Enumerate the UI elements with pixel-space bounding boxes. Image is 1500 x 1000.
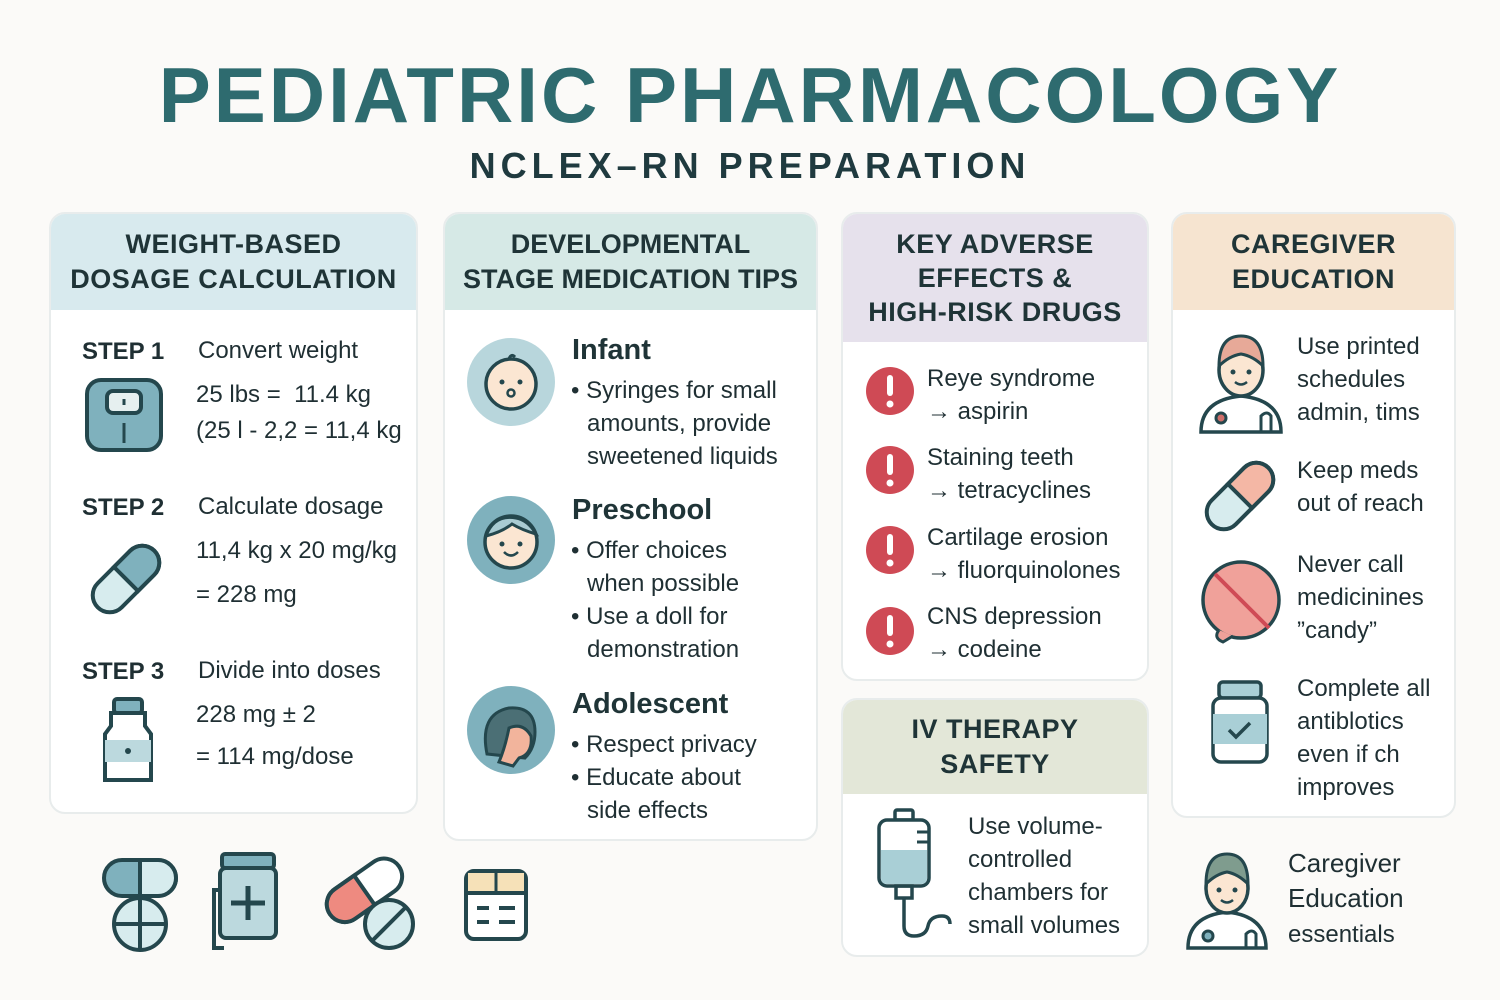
item: teeth [866,444,1091,504]
panel: iv therapy: controlled [968,846,1072,873]
item: keep meds [1204,457,1424,532]
heading: HIGH-RISK DRUGS [868,297,1122,327]
step 3: 228 mg ± 2 [196,701,316,728]
panel: caregiver education [1171,212,1456,818]
heading: EDUCATION [1232,264,1395,294]
icon: capsule and tablet [324,856,415,950]
adolescent: • Respect privacy [571,731,757,758]
step 2: 11,4 kg x 20 mg/kg [196,537,397,564]
step 1: 25 lbs = 11.4 kg [196,381,371,408]
icon: iv bag [877,808,952,938]
item: cns [866,603,1102,663]
heading: EFFECTS & [918,263,1072,293]
caregiver essentials callout [1186,848,1404,950]
item: cartilage: Cartilage erosion [927,524,1108,551]
item: complete antibiotics: antiblotics [1297,708,1404,735]
step 2 [82,493,397,614]
item: cartilage: → fluorquinolones [927,557,1120,584]
heading [51,214,416,310]
step 1: STEP 1 [82,338,164,365]
step 3 [82,657,381,782]
panel: developmental stage [443,212,818,841]
heading: DOSAGE CALCULATION [70,264,397,294]
heading [843,700,1147,794]
panel: weight-based dosage [49,212,418,814]
item: never call candy [1201,551,1424,644]
icon: infant face [467,338,555,426]
icon row: bottom decorative icons [102,852,528,952]
panel: iv therapy: small volumes [968,912,1120,939]
heading [843,214,1147,342]
item: complete antibiotics: Complete all [1297,675,1430,702]
panel: iv therapy: chambers for [968,879,1108,906]
icon: iv bottle [212,852,278,950]
title: PEDIATRIC PHARMACOLOGY [159,51,1341,139]
preschool: • Use a doll for [571,603,727,630]
heading: DEVELOPMENTAL [511,229,750,259]
item: printed schedules [1199,333,1420,434]
icon: scale [85,378,163,452]
heading [445,214,816,310]
icon: doctor [1186,852,1268,950]
panel: iv therapy [841,698,1149,957]
item: complete antibiotics: even if ch [1297,741,1400,768]
preschool: demonstration [587,636,739,663]
infant: • Syringes for small [571,377,777,404]
item: teeth: Staining teeth [927,444,1074,471]
infant: amounts, provide [587,410,771,437]
heading: CAREGIVER [1231,229,1396,259]
step 3: Divide into doses [198,657,381,684]
preschool: when possible [587,570,739,597]
step 2: STEP 2 [82,494,164,521]
adolescent [467,686,757,824]
step 2: = 228 mg [196,581,297,608]
caregiver essentials callout: essentials [1288,921,1395,948]
item: printed schedules: admin, tims [1297,399,1420,426]
step 2: Calculate dosage [198,493,383,520]
item: printed schedules: schedules [1297,366,1405,393]
item: cns: → codeine [927,636,1042,663]
icon: adolescent [467,686,555,774]
item: keep meds: out of reach [1297,490,1424,517]
panel: iv therapy: Use volume- [968,813,1103,840]
step 1 [82,337,402,452]
infant: Infant [572,334,651,366]
item: never call candy: Never call [1297,551,1404,578]
adolescent: Adolescent [572,688,728,720]
infant [467,334,778,470]
icon: jar [1211,680,1269,764]
heading: STAGE MEDICATION TIPS [463,264,798,294]
icon: calendar [464,869,528,941]
step 3: = 114 mg/dose [196,743,354,770]
subtitle: NCLEX–RN PREPARATION [470,145,1030,186]
item: reye: Reye syndrome [927,365,1095,392]
icon: pill [1204,460,1276,532]
icon: nurse [1199,334,1283,434]
heading: IV THERAPY [911,714,1079,744]
item: complete antibiotics [1211,675,1430,801]
caregiver essentials callout: Education [1288,883,1404,913]
item: cartilage [866,524,1120,584]
panel: adverse effects [841,212,1149,681]
icon: pills [102,858,178,952]
icon: preschool face [467,496,555,584]
caregiver essentials callout: Caregiver [1288,848,1401,878]
preschool: Preschool [572,494,712,526]
item: reye: → aspirin [927,398,1028,425]
item: teeth: → tetracyclines [927,477,1091,504]
adolescent: • Educate about [571,764,741,791]
adolescent: side effects [587,797,708,824]
item: reye [866,365,1095,425]
item: never call candy: medicinines [1297,584,1424,611]
heading [1173,214,1454,310]
item: keep meds: Keep meds [1297,457,1418,484]
item: complete antibiotics: improves [1297,774,1394,801]
icon: alert [866,367,914,415]
icon: bottle [103,697,153,782]
heading: WEIGHT-BASED [125,229,342,259]
item: printed schedules: Use printed [1297,333,1420,360]
icon: capsule [90,544,162,614]
item: never call candy: ”candy” [1297,617,1377,644]
step 1: (25 l - 2,2 = 11,4 kg [196,417,402,444]
step 1: Convert weight [198,337,358,364]
heading: SAFETY [940,749,1050,779]
preschool: • Offer choices [571,537,727,564]
step 3: STEP 3 [82,658,164,685]
preschool [467,494,739,663]
icon: no candy [1201,560,1281,644]
infant: sweetened liquids [587,443,778,470]
heading: KEY ADVERSE [896,229,1094,259]
item: cns: CNS depression [927,603,1102,630]
